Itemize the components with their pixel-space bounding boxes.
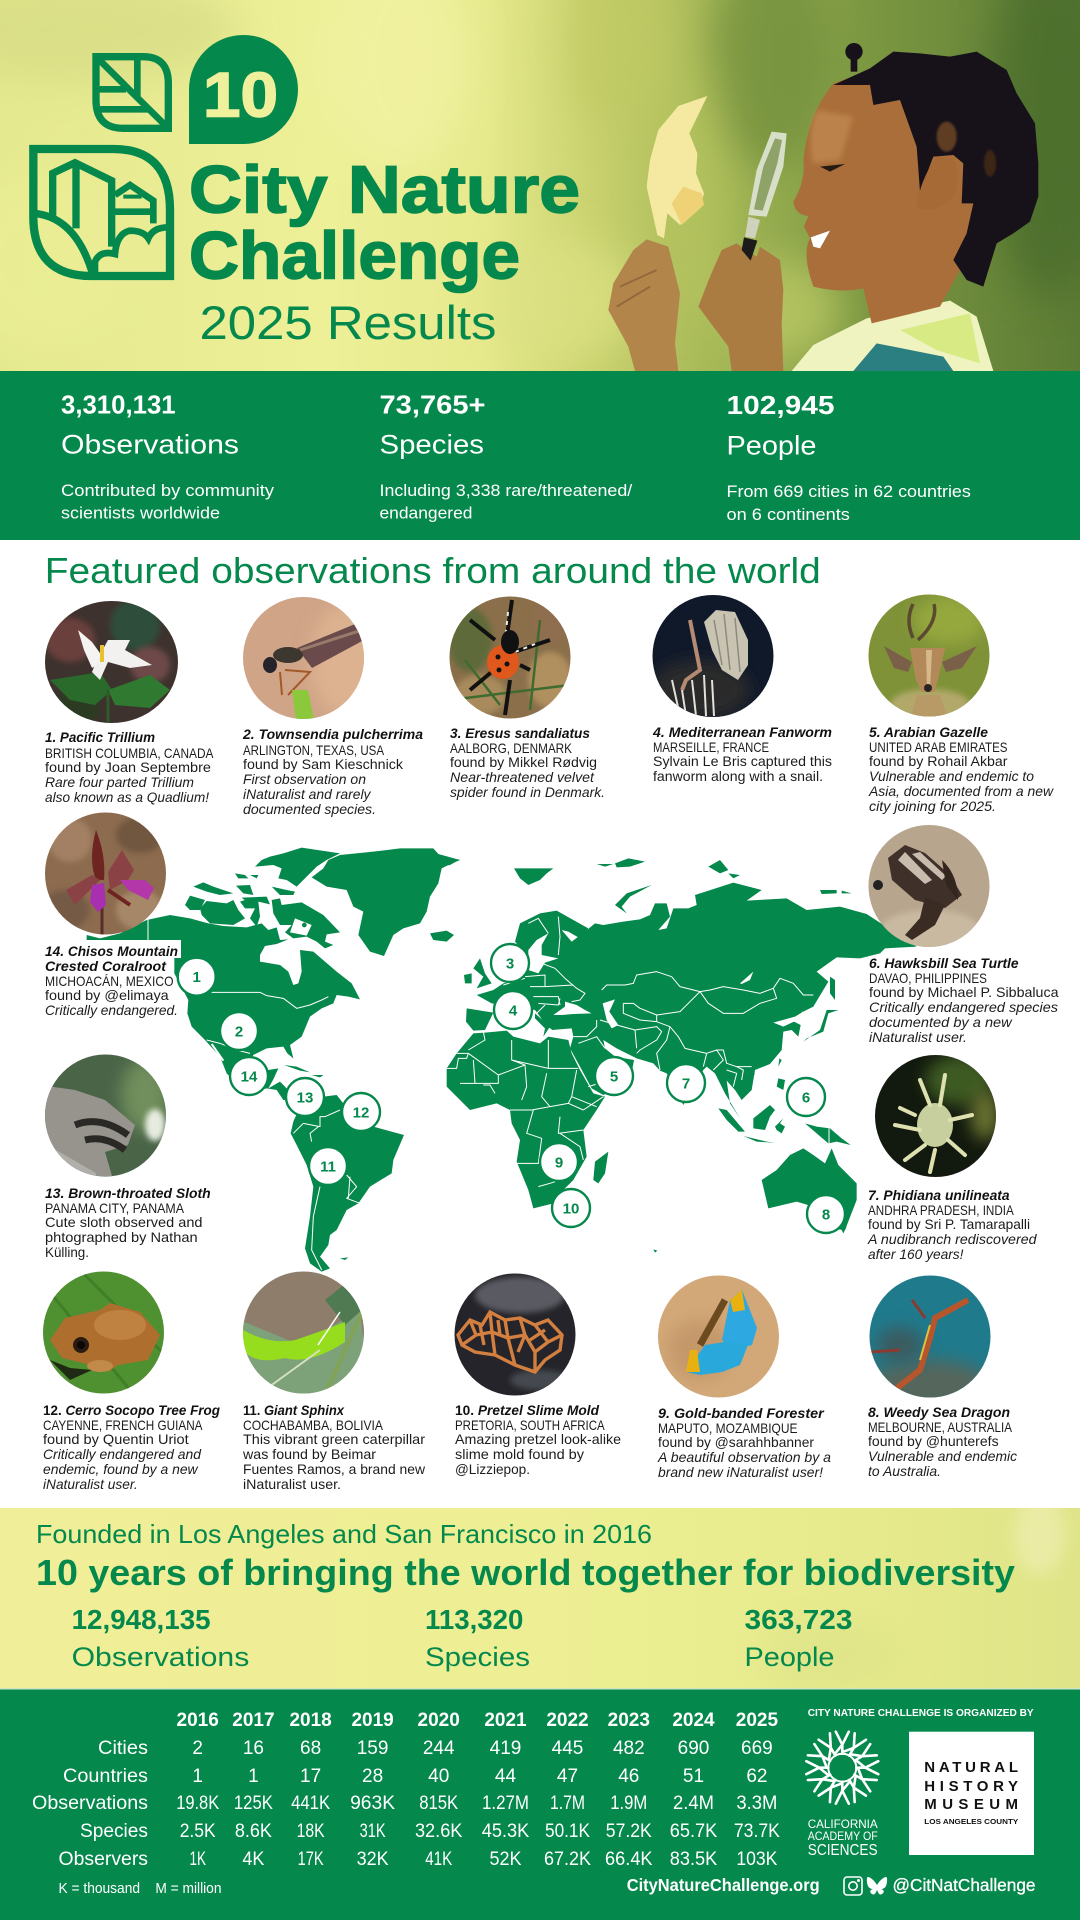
table header years: 2019: [351, 1710, 394, 1731]
pin 7: 7: [682, 1076, 690, 1092]
photo: tree frog: [43, 1272, 164, 1394]
table row: cities: 159: [357, 1738, 388, 1759]
social handle: @CitNatChallenge: [892, 1875, 1036, 1895]
table row: observers: 52K: [490, 1849, 522, 1870]
table header years: 2020: [418, 1710, 460, 1731]
table row: observers: 1K: [189, 1849, 206, 1870]
table row: species: [80, 1821, 780, 1842]
stat: people: [726, 390, 971, 524]
pin 6: [787, 1078, 825, 1116]
caption: found by @elimaya: [45, 987, 169, 1003]
photo 14 text backing: [40, 940, 181, 1020]
table row: species: 31K: [360, 1821, 386, 1842]
caption: spider found in Denmark.: [450, 784, 605, 800]
photo: green caterpillar: [243, 1272, 364, 1394]
stat: people: People: [726, 430, 816, 460]
caption: Critically endangered species: [869, 999, 1058, 1015]
cumulative species: 113,320: [425, 1604, 523, 1635]
pin 8: [807, 1195, 845, 1233]
photo: velvet spider: [450, 596, 570, 718]
map: Americas and Greenland: [87, 848, 460, 1272]
card 11: Giant Sphinx: [240, 1270, 426, 1492]
caption: Fuentes Ramos, a brand new: [243, 1461, 426, 1477]
panel: footer: [0, 1688, 1080, 1920]
table row: countries: 44: [495, 1766, 516, 1787]
card 6: Hawksbill Sea Turtle: [865, 823, 1059, 1045]
stat: species: [380, 390, 632, 522]
leaf: [647, 96, 707, 238]
title: [189, 152, 580, 294]
photo: turtle hatchling: [868, 825, 990, 947]
photo: butterfly: [658, 1276, 779, 1398]
table row: cities: 482: [613, 1738, 645, 1759]
cumulative people: 363,723: [744, 1604, 852, 1635]
table row: countries: 40: [428, 1766, 449, 1787]
cumulative people: [744, 1604, 852, 1672]
table row: species: 57.2K: [606, 1821, 652, 1842]
card 12: Cerro Socopo Tree Frog: [40, 1270, 220, 1492]
table row: countries: 46: [618, 1766, 639, 1787]
caption: Amazing pretzel look-alike: [455, 1431, 621, 1447]
caption: AALBORG, DENMARK: [450, 740, 573, 756]
cumulative observations: [72, 1604, 249, 1672]
caption: BRITISH COLUMBIA, CANADA: [45, 745, 214, 761]
caption: city joining for 2025.: [869, 798, 996, 814]
ear: [920, 170, 928, 192]
caption: iNaturalist user.: [869, 1029, 967, 1045]
world map: [87, 848, 917, 1272]
table row: observations: 1.7M: [550, 1793, 585, 1814]
founded line: Founded in Los Angeles and San Francisco in 2016: [36, 1519, 652, 1549]
table row: observations: 815K: [419, 1793, 458, 1814]
caption: [657, 1405, 831, 1480]
caption: 4. Mediterranean Fanworm: [652, 724, 832, 740]
card 5: Arabian Gazelle: [865, 593, 1054, 814]
hands: [608, 239, 680, 371]
photo: child with magnifying glass and leaf: [608, 43, 1038, 371]
caption: First observation on: [243, 771, 366, 787]
table row: countries: 51: [683, 1766, 704, 1787]
icon: bluesky butterfly: [867, 1877, 887, 1895]
cumulative people: People: [744, 1642, 834, 1672]
card 9: Gold-banded Forester: [655, 1272, 831, 1480]
pin 2: 2: [235, 1024, 243, 1040]
card 14: Chisos Mountain Crested Coralroot: [40, 810, 178, 1018]
caption: [869, 955, 1059, 1045]
map: Eurasia, Africa, Oceania: [440, 858, 917, 1253]
table row: cities: 16: [243, 1738, 264, 1759]
caption: Asia, documented from a new: [868, 783, 1054, 799]
caption: iNaturalist user.: [243, 1476, 341, 1492]
caption: to Australia.: [868, 1463, 941, 1479]
stat: observations: Contributed by community: [61, 481, 275, 500]
stat: species: Species: [380, 430, 484, 460]
table row: observations: 963K: [350, 1793, 395, 1814]
caption: Critically endangered and: [43, 1446, 202, 1462]
magnifying glass: [742, 132, 787, 261]
photo: fly: [243, 597, 364, 719]
logo: California Academy of Sciences: CALIFORNIA: [808, 1817, 878, 1831]
pin 4: 4: [509, 1002, 518, 1020]
organized by label: CITY NATURE CHALLENGE IS ORGANIZED BY: [808, 1707, 1034, 1719]
caption: Vulnerable and endemic: [868, 1448, 1017, 1464]
table row: cities: [98, 1738, 773, 1759]
card 4: Mediterranean Fanworm: [650, 593, 832, 784]
table header years: 2017: [232, 1710, 275, 1731]
caption: PRETORIA, SOUTH AFRICA: [455, 1417, 605, 1433]
caption: brand new iNaturalist user!: [658, 1464, 823, 1480]
table row: countries: 28: [362, 1766, 383, 1787]
cumulative species: [425, 1604, 530, 1672]
caption: CAYENNE, FRENCH GUIANA: [43, 1417, 203, 1433]
stat: species: endangered: [380, 504, 472, 522]
photo: fanworm: [652, 595, 774, 717]
table row: observations: 3.3M: [736, 1793, 777, 1814]
caption: documented species.: [243, 801, 376, 817]
cumulative species: Species: [425, 1642, 530, 1672]
table row: observations: Observations: [32, 1793, 148, 1814]
table row: countries: 62: [746, 1766, 767, 1787]
caption: [45, 729, 214, 805]
caption: A nudibranch rediscovered: [867, 1231, 1038, 1247]
stat: observations: scientists worldwide: [61, 504, 220, 522]
caption: slime mold found by: [455, 1446, 584, 1462]
map: inland seas: [528, 933, 753, 1028]
stat: people: From 669 cities in 62 countries: [726, 482, 971, 501]
table row: cities: 419: [490, 1738, 521, 1759]
caption: 13. Brown-throated Sloth: [45, 1185, 211, 1201]
logo: Natural History Museum: [909, 1732, 1034, 1855]
caption: MARSEILLE, FRANCE: [653, 739, 769, 755]
table row: species: 73.7K: [734, 1821, 780, 1842]
photo: gazelle: [868, 594, 990, 716]
caption: was found by Beimar: [242, 1446, 376, 1462]
pin 11: 11: [320, 1158, 336, 1176]
table header years: 2025: [736, 1710, 778, 1731]
caption: DAVAO, PHILIPPINES: [869, 970, 987, 986]
table row: countries: 1: [192, 1766, 203, 1787]
caption: [455, 1402, 621, 1477]
map: Canadian Arctic islands: [185, 848, 340, 948]
map borders: Americas: [148, 918, 360, 1270]
table header years: 2021: [484, 1710, 527, 1731]
stat: observations: 3,310,131: [61, 390, 176, 420]
logo: leaf icon: [96, 57, 168, 128]
table row: cities: 2: [192, 1738, 203, 1759]
table header years: 2018: [289, 1710, 332, 1731]
table header years: 2023: [608, 1710, 650, 1731]
card 2: Townsendia pulcherrima: [240, 595, 423, 817]
table: yearly results: [32, 1710, 780, 1870]
table row: observers: 17K: [298, 1849, 324, 1870]
table row: observers: 67.2K: [544, 1849, 591, 1870]
photo: sloth: [45, 1054, 166, 1176]
title: City Nature: [189, 152, 580, 228]
table row: countries: 1: [248, 1766, 259, 1787]
pin 5: 5: [610, 1068, 618, 1086]
card 3: Eresus sandaliatus: [445, 595, 605, 800]
neck and face: [793, 72, 973, 323]
stat: species: Including 3,338 rare/threatened/: [380, 481, 632, 500]
caption: A beautiful observation by a: [657, 1449, 831, 1465]
caption: 3. Eresus sandaliatus: [450, 725, 590, 741]
card 10: Pretzel Slime Mold: [450, 1270, 621, 1477]
caption: [868, 1404, 1017, 1479]
pin 8: 8: [822, 1206, 830, 1224]
caption: iNaturalist and rarely: [243, 786, 371, 802]
title: Challenge: [189, 218, 520, 294]
pin 14: 14: [241, 1068, 258, 1086]
pin 11: [309, 1147, 347, 1185]
photo: pretzel slime mold: [454, 1274, 576, 1396]
caption: UNITED ARAB EMIRATES: [869, 739, 1008, 755]
table row: observations: 125K: [234, 1793, 273, 1814]
caption: documented by a new: [869, 1014, 1013, 1030]
caption: 6. Hawksbill Sea Turtle: [869, 955, 1019, 971]
pin 10: [552, 1189, 590, 1227]
table row: cities: 68: [300, 1738, 321, 1759]
table header years: 2024: [672, 1710, 715, 1731]
table row: species: 32.6K: [415, 1821, 463, 1842]
pin 13: [286, 1078, 324, 1116]
pin 1: 1: [193, 969, 201, 986]
table row: observers: 4K: [242, 1849, 265, 1870]
band heading: 10 years of bringing the world together for biodiversity: [36, 1552, 1016, 1593]
cumulative observations: Observations: [72, 1642, 249, 1672]
table legend: K = thousand M = million: [58, 1881, 222, 1897]
hair: [833, 43, 1038, 287]
table row: observers: 66.4K: [605, 1849, 653, 1870]
table row: observers: 41K: [425, 1849, 452, 1870]
logo: California Academy of Sciences: ACADEMY OF: [808, 1829, 878, 1843]
stat: species: 73,765+: [380, 390, 486, 420]
map pins: [178, 944, 845, 1233]
stat: observations: Observations: [61, 430, 239, 460]
heading: featured observations: Featured observations from around the world: [45, 550, 821, 591]
table row: species: 18K: [297, 1821, 325, 1842]
caption: 11. Giant Sphinx: [243, 1402, 345, 1418]
blurred foliage background: [0, 0, 1080, 360]
pin 1: [178, 958, 216, 996]
caption: found by Sam Kieschnick: [243, 756, 404, 772]
panel: 10 years yellow band: [0, 1495, 1080, 1688]
card 13: Brown-throated Sloth: [40, 1050, 211, 1260]
table row: cities: Cities: [98, 1738, 148, 1759]
table row: observations: 441K: [291, 1793, 330, 1814]
stat: observations: [61, 390, 275, 522]
icon: instagram: [844, 1877, 862, 1895]
caption: Cute sloth observed and: [45, 1214, 202, 1230]
logo: Natural History Museum: HISTORY: [924, 1778, 1018, 1795]
caption: Critically endangered.: [45, 1002, 178, 1018]
caption: Sylvain Le Bris captured this: [653, 753, 832, 769]
pin 7: [667, 1064, 705, 1102]
table row: observers: 83.5K: [670, 1849, 718, 1870]
table row: observers: [58, 1849, 778, 1870]
caption: iNaturalist user.: [43, 1476, 138, 1492]
caption: ANDHRA PRADESH, INDIA: [868, 1202, 1014, 1218]
table row: species: 45.3K: [482, 1821, 530, 1842]
caption: Külling.: [45, 1244, 89, 1260]
table row: observations: 2.4M: [673, 1793, 714, 1814]
caption: [43, 1402, 220, 1492]
logo: Natural History Museum: NATURAL: [924, 1759, 1018, 1776]
caption: 5. Arabian Gazelle: [869, 724, 988, 740]
caption: 2. Townsendia pulcherrima: [242, 726, 423, 742]
subtitle: 2025 Results: [200, 296, 496, 349]
caption: @Lizziepop.: [455, 1461, 530, 1477]
caption: [652, 724, 832, 784]
table row: observers: 103K: [736, 1849, 778, 1870]
table row: countries: [63, 1766, 767, 1787]
photo: nudibranch: [875, 1055, 996, 1177]
pin 4: [494, 991, 532, 1029]
caption: Near-threatened velvet: [450, 769, 595, 785]
shirt: [792, 301, 993, 371]
caption: found by Joan Septembre: [45, 759, 211, 775]
logo: Natural History Museum: MUSEUM: [924, 1796, 1018, 1813]
pin 10: 10: [563, 1200, 579, 1218]
pin 9: 9: [555, 1154, 563, 1172]
caption: 12. Cerro Socopo Tree Frog: [43, 1402, 220, 1418]
caption: [45, 1185, 211, 1260]
table row: observations: 1.9M: [610, 1793, 647, 1814]
table row: observations: 19.8K: [176, 1793, 219, 1814]
caption: Crested Coralroot: [45, 958, 167, 974]
caption: found by @sarahhbanner: [658, 1434, 814, 1450]
logo: California Academy of Sciences: SCIENCES: [808, 1842, 878, 1859]
pin 12: 12: [353, 1104, 369, 1122]
table row: observations: [32, 1793, 777, 1814]
table row: countries: Countries: [63, 1766, 148, 1787]
pin 3: [491, 944, 529, 982]
caption: phtographed by Nathan: [45, 1229, 198, 1245]
caption: also known as a Quadlium!: [45, 789, 209, 805]
table row: cities: 244: [423, 1738, 455, 1759]
caption: 14. Chisos Mountain: [45, 943, 178, 959]
table header years: 2022: [546, 1710, 589, 1731]
caption: found by @hunterefs: [868, 1433, 999, 1449]
pin 6: 6: [802, 1090, 810, 1106]
table row: species: 50.1K: [545, 1821, 590, 1842]
caption: COCHABAMBA, BOLIVIA: [243, 1417, 384, 1433]
caption: MICHOACÁN, MEXICO: [45, 973, 174, 989]
caption: fanworm along with a snail.: [653, 768, 823, 784]
caption: 8. Weedy Sea Dragon: [868, 1404, 1010, 1420]
caption: PANAMA CITY, PANAMA: [45, 1200, 185, 1216]
table header years: 2016: [177, 1710, 219, 1731]
caption: [45, 943, 178, 1018]
table row: observations: 1.27M: [482, 1793, 529, 1814]
photo: sea dragon: [870, 1276, 990, 1398]
caption: [868, 724, 1054, 814]
caption: found by Quentin Uriot: [43, 1431, 189, 1447]
table row: species: 2.5K: [180, 1821, 216, 1842]
stat: people: on 6 continents: [726, 505, 850, 524]
caption: found by Michael P. Sibbaluca: [869, 984, 1059, 1000]
table header years: [177, 1710, 778, 1731]
band blurred highlights: [1011, 1508, 1069, 1578]
caption: [450, 725, 605, 800]
table row: species: 65.7K: [670, 1821, 718, 1842]
logo: number 10 pin: [189, 35, 298, 144]
card 8: Weedy Sea Dragon: [865, 1272, 1017, 1479]
caption: 10. Pretzel Slime Mold: [455, 1402, 599, 1418]
stat: people: 102,945: [726, 390, 834, 420]
caption: found by Rohail Akbar: [869, 753, 1008, 769]
photo: coralroot orchid: [45, 812, 166, 934]
caption: [242, 1402, 426, 1492]
caption: Vulnerable and endemic to: [869, 768, 1034, 784]
hero banner: [0, 0, 1080, 371]
pin 12: [342, 1093, 380, 1131]
caption: This vibrant green caterpillar: [243, 1431, 425, 1447]
panel: 2025 stats band: [0, 371, 1080, 540]
table row: observers: Observers: [58, 1849, 148, 1870]
caption: MAPUTO, MOZAMBIQUE: [658, 1420, 798, 1436]
table row: species: 8.6K: [235, 1821, 272, 1842]
caption: [242, 726, 423, 817]
logo: city in leaf icon: [33, 149, 170, 277]
table row: cities: 669: [741, 1738, 773, 1759]
caption: 1. Pacific Trillium: [45, 729, 155, 745]
pin 5: [595, 1057, 633, 1095]
table row: cities: 445: [552, 1738, 583, 1759]
cumulative observations: 12,948,135: [72, 1604, 211, 1635]
pin 9: [540, 1143, 578, 1181]
pin 13: 13: [297, 1090, 313, 1106]
caption: 7. Phidiana unilineata: [868, 1187, 1010, 1203]
pin 3: 3: [506, 956, 514, 972]
caption: MELBOURNE, AUSTRALIA: [868, 1419, 1013, 1435]
website link: CityNatureChallenge.org: [627, 1875, 820, 1895]
table row: species: Species: [80, 1821, 148, 1842]
caption: 9. Gold-banded Forester: [658, 1405, 825, 1421]
caption: found by Mikkel Rødvig: [450, 754, 597, 770]
caption: after 160 years!: [868, 1246, 964, 1262]
table row: cities: 690: [678, 1738, 709, 1759]
caption: found by Sri P. Tamarapalli: [868, 1216, 1030, 1232]
table row: countries: 47: [557, 1766, 578, 1787]
pin 2: [220, 1012, 258, 1050]
photo: trillium: [45, 601, 178, 723]
caption: ARLINGTON, TEXAS, USA: [243, 742, 385, 758]
logo: number 10 pin: 10: [203, 60, 278, 130]
caption: endemic, found by a new: [43, 1461, 198, 1477]
table row: countries: 17: [300, 1766, 321, 1787]
map borders: Old World: [447, 917, 829, 1187]
card 1: Pacific Trillium: [40, 595, 214, 805]
caption: Rare four parted Trillium: [45, 774, 194, 790]
card 7: Phidiana unilineata: [867, 1052, 1038, 1262]
table row: observers: 32K: [357, 1849, 389, 1870]
pin 14: [230, 1057, 268, 1095]
caption: [867, 1187, 1038, 1262]
logo: Natural History Museum: LOS ANGELES COUNTY: [924, 1817, 1018, 1826]
logo: California Academy of Sciences: [806, 1732, 878, 1859]
